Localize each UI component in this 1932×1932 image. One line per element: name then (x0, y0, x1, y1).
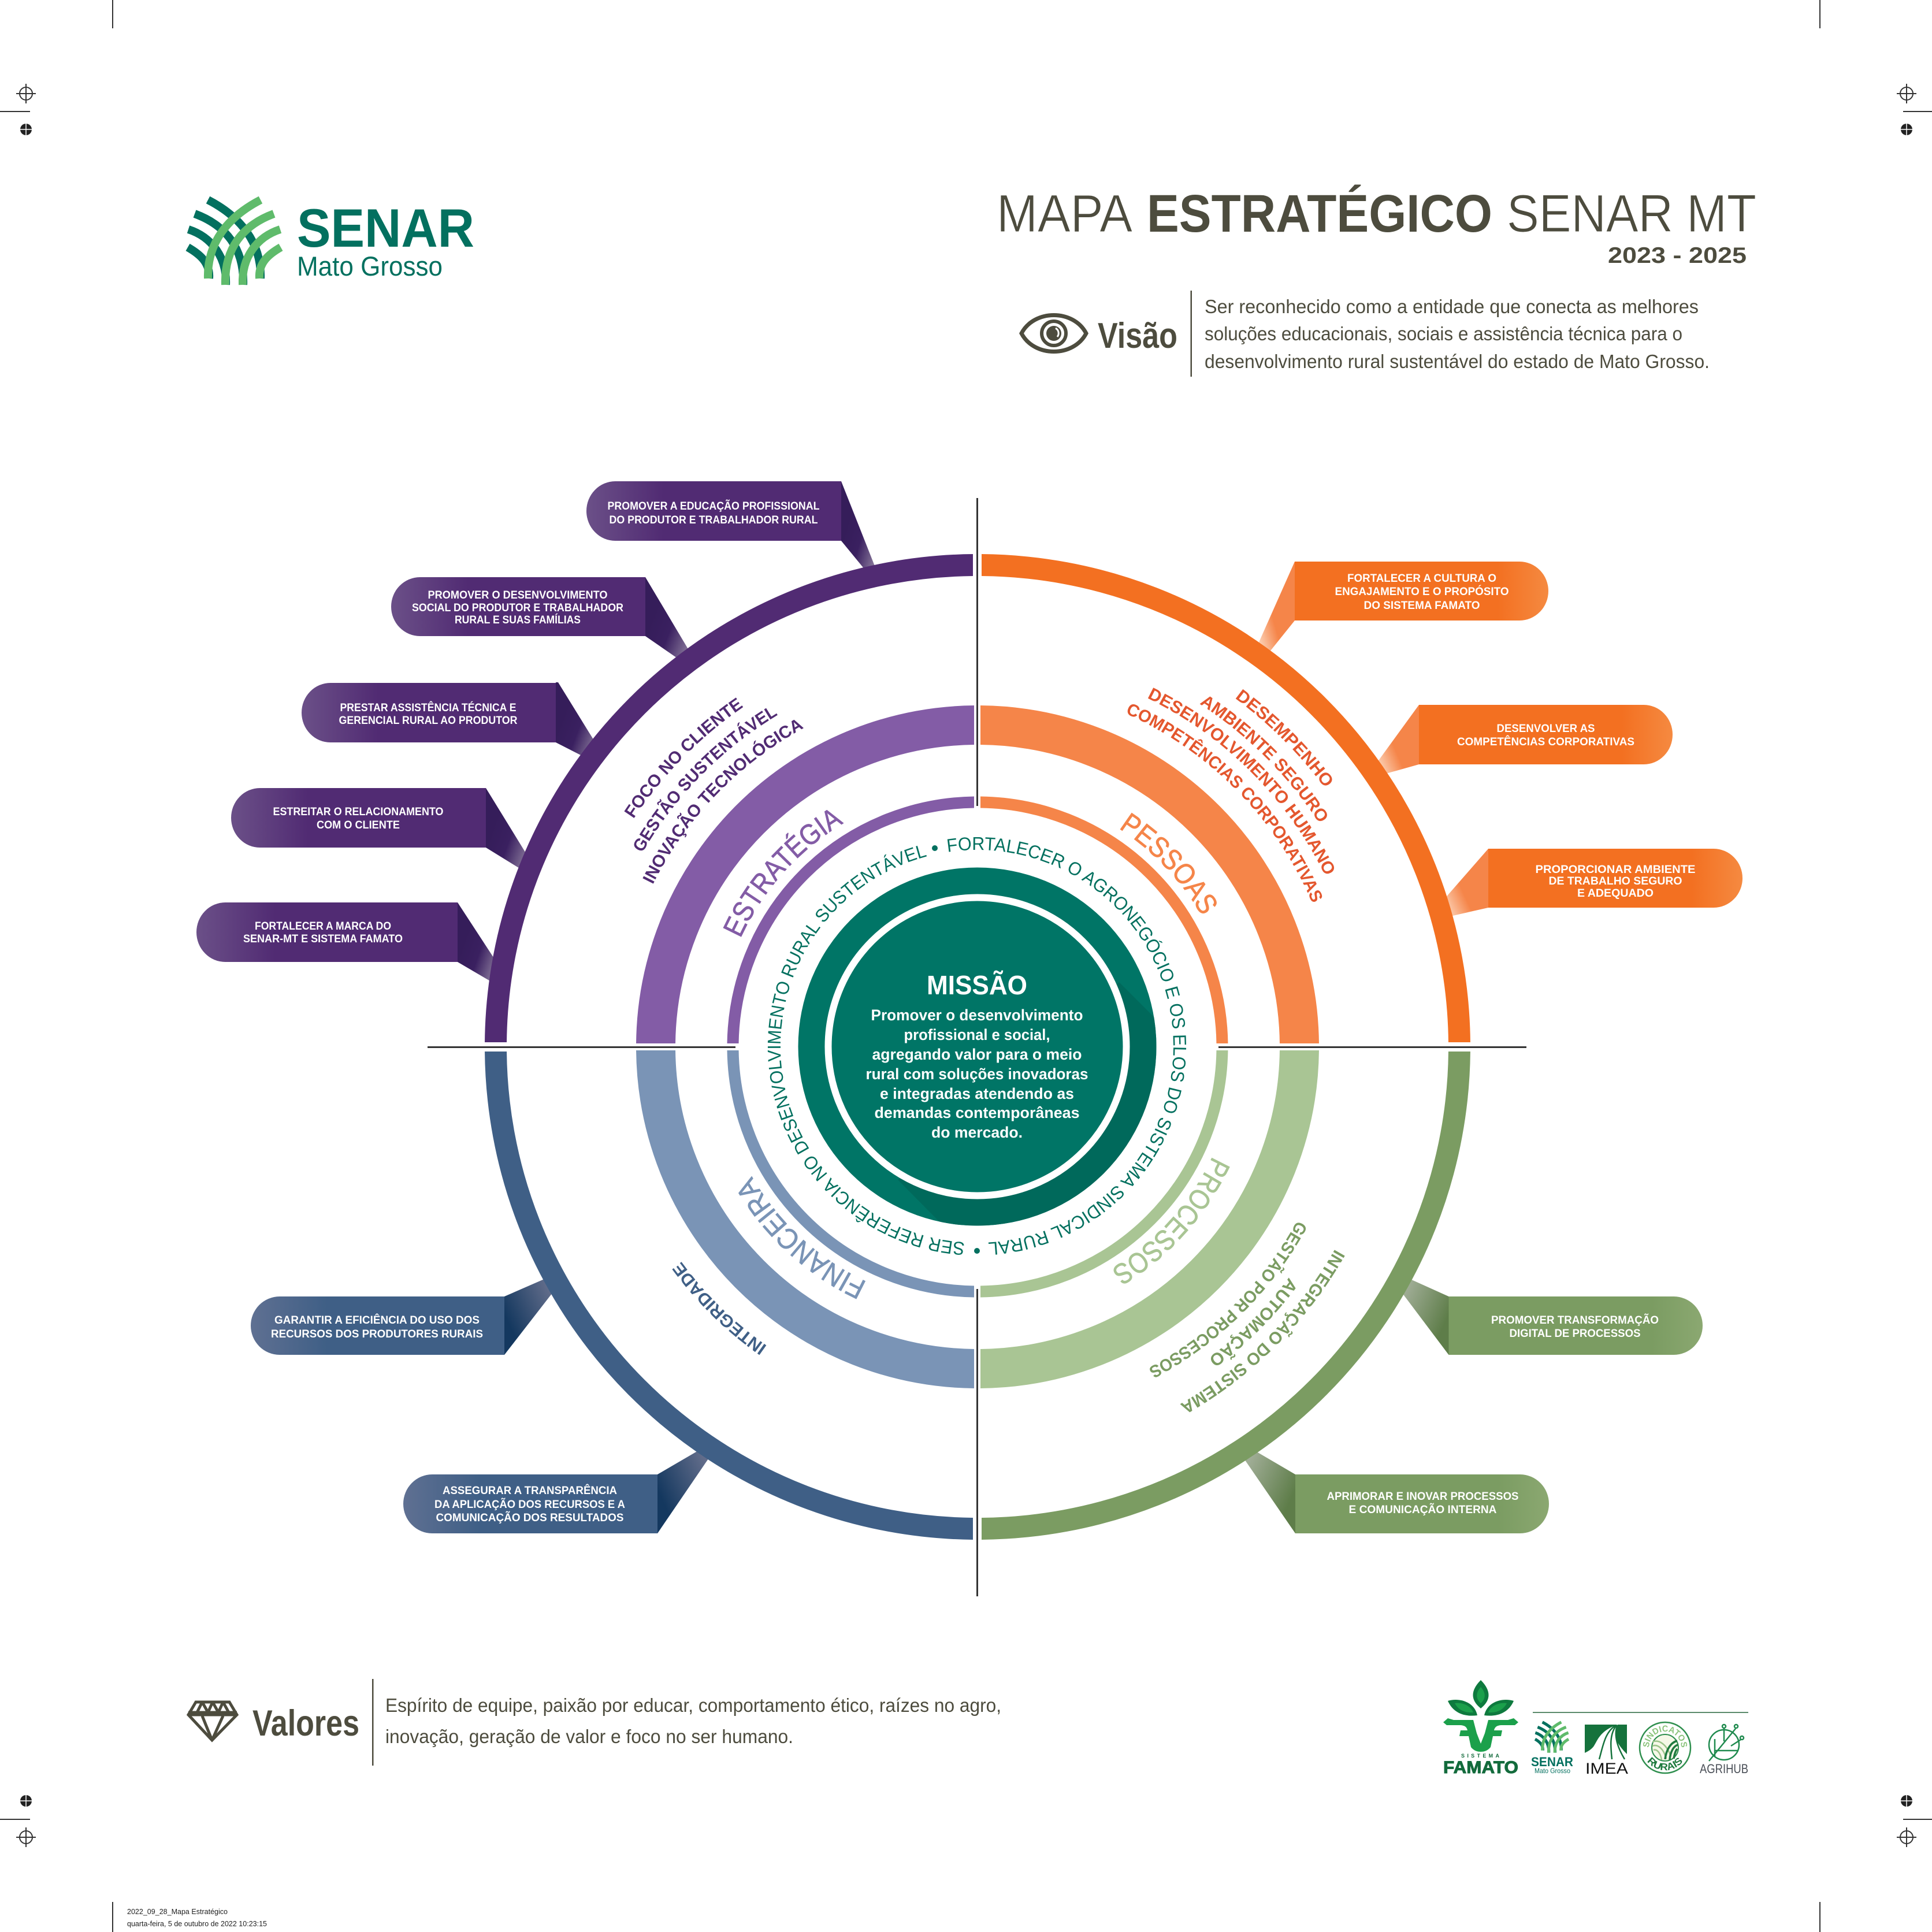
callout: aprimorar e inovar: APRIMORAR E INOVAR PROCESSOS (1327, 1491, 1518, 1503)
logo sub-wordmark: Mato Grosso (297, 251, 443, 281)
objectives: pessoas: DESEMPENHO (1235, 689, 1332, 786)
callout: promover o desenvolvimento social (391, 577, 689, 658)
middle ring: processos (980, 1050, 1319, 1388)
perspective title: ESTRATÉGIA: ESTRATÉGIA (723, 810, 844, 937)
vision statement: soluções educacionais, sociais e assistência técnica para o (1205, 323, 1682, 344)
mission statement: e integradas atendendo as (880, 1085, 1074, 1102)
values statement: Espírito de equipe, paixão por educar, comportamento ético, raízes no agro, (385, 1695, 1001, 1716)
callout: estreitar o relacionamento (231, 788, 526, 869)
callout: promover transformação digital (1402, 1279, 1703, 1355)
objectives: processos: AUTOMAÇÃO (1202, 1265, 1301, 1381)
icon: three leaves (1448, 1680, 1514, 1716)
objectives: financeira: INTEGRIDADE (657, 1255, 781, 1358)
logo: IMEA: IMEA (1585, 1760, 1628, 1777)
objectives: estratégia (621, 677, 811, 915)
callout: assegurar a transparência: ASSEGURAR A TRANSPARÊNCIA (443, 1484, 617, 1497)
middle ring: financeira (636, 1050, 974, 1388)
callout: prestar assistência técnica: GERENCIAL RURAL AO PRODUTOR (339, 715, 518, 727)
circular purpose text: SER REFERÊNCIA NO DESENVOLVIMENTO RURAL SUSTENTÁVEL (751, 831, 990, 1259)
vision statement (1205, 296, 1710, 372)
callout: assegurar a transparência (403, 1450, 708, 1533)
values statement: inovação, geração de valor e foco no ser humano. (385, 1726, 793, 1747)
callout: fortalecer a marca: FORTALECER A MARCA DO (255, 920, 391, 932)
objectives: estratégia: FOCO NO CLIENTE (624, 697, 743, 818)
print slug (127, 1908, 267, 1928)
callout: aprimorar e inovar (1244, 1451, 1549, 1533)
callout: promover a educação profissional: DO PRODUTOR E TRABALHADOR RURAL (609, 514, 818, 526)
callout: assegurar a transparência: COMUNICAÇÃO DOS RESULTADOS (436, 1511, 624, 1524)
callout: promover transformação digital: DIGITAL DE PROCESSOS (1509, 1328, 1641, 1340)
panel: Valores (188, 1679, 1001, 1766)
perspective title: PROCESSOS: PROCESSOS (1114, 1158, 1230, 1284)
callout: desenvolver as competências: COMPETÊNCIAS CORPORATIVAS (1457, 735, 1634, 748)
callout: estreitar o relacionamento: ESTREITAR O RELACIONAMENTO (273, 806, 444, 818)
icon: stylised cattle head (1443, 1718, 1518, 1752)
objectives: pessoas (1084, 684, 1376, 911)
heading: Visão: Visão (1098, 316, 1177, 356)
ring: estratégia (485, 554, 973, 1042)
callout: fortalecer a cultura: DO SISTEMA FAMATO (1363, 600, 1480, 612)
callout: fortalecer a cultura: FORTALECER A CULTURA O (1347, 573, 1496, 585)
logo: Sindicatos Rurais: SINDICATOS (1641, 1724, 1689, 1748)
mission statement: rural com soluções inovadoras (865, 1065, 1088, 1083)
callout: desenvolver as competências (1377, 705, 1673, 774)
mission statement: Promover o desenvolvimento (871, 1006, 1083, 1024)
logo: SENAR Mato Grosso (188, 198, 474, 285)
callout: fortalecer a cultura (1258, 562, 1548, 653)
title: MAPA (997, 184, 1133, 243)
perspective title: FINANCEIRA: FINANCEIRA (738, 1176, 865, 1299)
objectives: processos (1141, 1190, 1348, 1447)
callout: desenvolver as competências: DESENVOLVER AS (1496, 723, 1595, 735)
title (997, 184, 1756, 243)
mission statement: profissional e social, (904, 1026, 1050, 1043)
icon: eye (1021, 315, 1086, 351)
logo: Sistema FAMATO (1443, 1680, 1518, 1777)
circular purpose text: FORTALECER O AGRONEGÓCIO E OS ELOS DO SISTEMA SINDICAL RURAL (926, 804, 1220, 1260)
logo: SENAR small: Mato Grosso (1535, 1767, 1570, 1775)
callout: fortalecer a marca (196, 902, 495, 982)
callout: fortalecer a marca: SENAR-MT E SISTEMA FAMATO (243, 933, 403, 945)
panel: Visão (1021, 291, 1710, 377)
callout: promover a educação profissional (586, 481, 875, 570)
objectives: pessoas: COMPETÊNCIAS CORPORATIVAS (1084, 700, 1368, 911)
print slug: quarta-feira, 5 de outubro de 2022 10:23:15 (127, 1920, 267, 1928)
objectives: processos: INTEGRAÇÃO DO SISTEMA (1173, 1218, 1348, 1447)
perspective title: PESSOAS: PESSOAS (1120, 812, 1217, 914)
title: ESTRATÉGICO (1147, 184, 1492, 243)
callout: promover o desenvolvimento social: PROMOVER O DESENVOLVIMENTO (428, 589, 608, 601)
panel: missão (798, 868, 1157, 1226)
logo: AGRIHUB: AGRIHUB (1700, 1762, 1748, 1776)
callout: estreitar o relacionamento: COM O CLIENTE (317, 819, 400, 831)
quadrant rings chart (496, 565, 1459, 1529)
heading: Valores: Valores (252, 1703, 359, 1744)
icon: diamond (188, 1702, 237, 1740)
callout: promover o desenvolvimento social: SOCIAL DO PRODUTOR E TRABALHADOR (412, 602, 623, 614)
objectives: pessoas: DESENVOLVIMENTO HUMANO (1109, 684, 1376, 883)
mission statement: do mercado. (931, 1124, 1023, 1141)
callout: aprimorar e inovar: E COMUNICAÇÃO INTERNA (1348, 1503, 1497, 1516)
heading: MISSÃO: MISSÃO (927, 970, 1027, 1000)
FAMATO wordmark: SISTEMA (1461, 1753, 1500, 1759)
mission statement: agregando valor para o meio (872, 1046, 1082, 1063)
print slug: 2022_09_28_Mapa Estratégico (127, 1908, 228, 1916)
callout: promover o desenvolvimento social: RURAL E SUAS FAMÍLIAS (455, 614, 581, 626)
callout: proporcionar ambiente: DE TRABALHO SEGURO (1548, 875, 1682, 887)
logo: Sistema FAMATO: FAMATO (1443, 1758, 1518, 1777)
logo: SENAR small: SENAR (1531, 1755, 1573, 1769)
subtitle: years: 2023 - 2025 (1608, 243, 1747, 268)
circular purpose text (751, 804, 1220, 1260)
ring: pessoas (982, 554, 1470, 1042)
icon: SENAR woven field mark (188, 200, 281, 285)
callout: promover transformação digital: PROMOVER TRANSFORMAÇÃO (1491, 1314, 1659, 1327)
title: SENAR MT (1507, 184, 1756, 243)
logo wordmark: SENAR (297, 198, 474, 258)
callout: prestar assistência técnica: PRESTAR ASSISTÊNCIA TÉCNICA E (340, 701, 517, 714)
callout: proporcionar ambiente: PROPORCIONAR AMBIENTE (1536, 864, 1695, 876)
callout: promover a educação profissional: PROMOVER A EDUCAÇÃO PROFISSIONAL (608, 500, 820, 512)
objectives: processos: GESTÃO POR PROCESSOS (1141, 1190, 1311, 1411)
vision statement: Ser reconhecido como a entidade que conecta as melhores (1205, 296, 1699, 317)
vision statement: desenvolvimento rural sustentável do estado de Mato Grosso. (1205, 351, 1710, 372)
objectives: estratégia: GESTÃO SUSTENTÁVEL (634, 708, 778, 850)
callout: assegurar a transparência: DA APLICAÇÃO DOS RECURSOS E A (434, 1498, 625, 1511)
values statement (385, 1695, 1001, 1747)
logo: SENAR small (1531, 1722, 1573, 1775)
ring: processos (982, 1052, 1470, 1540)
objectives: estratégia: INOVAÇÃO TECNOLÓGICA (642, 720, 804, 884)
logo: Sindicatos Rurais: RURAIS (1645, 1755, 1685, 1773)
middle ring: pessoas (980, 705, 1319, 1043)
objectives: pessoas: AMBIENTE SEGURO (1199, 697, 1327, 822)
callout: prestar assistência técnica (302, 682, 595, 756)
logo: AGRIHUB (1700, 1725, 1748, 1776)
ring: financeira (485, 1052, 973, 1540)
callout: garantir a eficiência: GARANTIR A EFICIÊNCIA DO USO DOS (274, 1314, 480, 1327)
logo: Sindicatos Rurais (1640, 1722, 1690, 1773)
middle ring: estratégia (636, 705, 974, 1043)
callout: garantir a eficiência (251, 1279, 552, 1355)
logo: IMEA (1585, 1725, 1628, 1777)
mission statement (865, 1006, 1088, 1141)
mission statement: demandas contemporâneas (875, 1104, 1079, 1121)
callout: proporcionar ambiente: E ADEQUADO (1577, 887, 1654, 900)
callout: fortalecer a cultura: ENGAJAMENTO E O PROPÓSITO (1335, 585, 1509, 598)
callout: proporcionar ambiente (1444, 849, 1742, 916)
callout: garantir a eficiência: RECURSOS DOS PRODUTORES RURAIS (271, 1328, 483, 1340)
